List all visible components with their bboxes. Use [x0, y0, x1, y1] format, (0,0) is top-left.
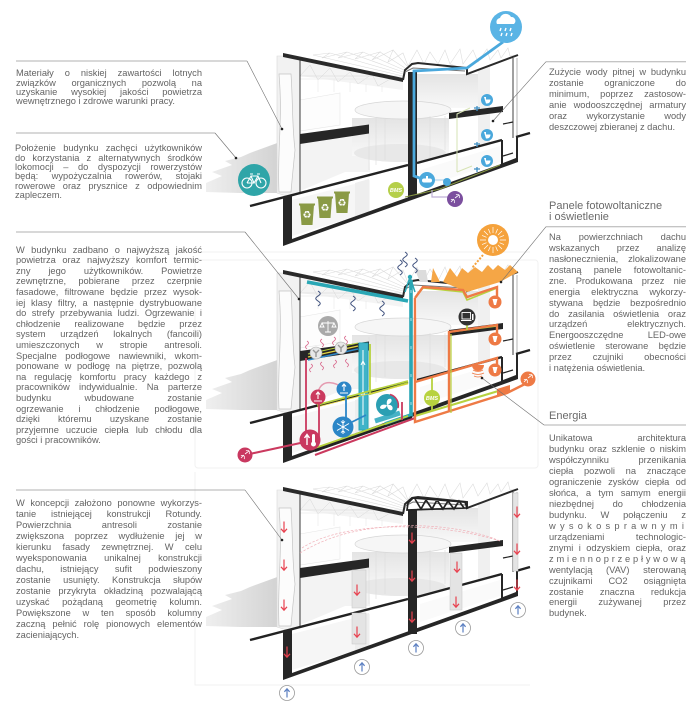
icon: orange link [520, 372, 536, 386]
text: photovoltaics: i natężenia oświetlenia. [549, 363, 645, 373]
leader lines [16, 61, 686, 541]
icon: rain cloud [490, 11, 522, 43]
text: energy: ograniczenie zysków ciepła od [549, 477, 686, 487]
text: photovoltaics: Na powierzchniach dachu [549, 232, 686, 242]
text: construction: zostanie usunięty. Konstrukcja słupów [16, 574, 202, 584]
text: water use: Zużycie wody pitnej w budynku [549, 67, 686, 77]
building section 1: water [206, 11, 530, 246]
text: air quality: gości i pracowników. [16, 435, 101, 445]
dashed arcs [300, 526, 500, 553]
recycling bins: ♻ [321, 203, 330, 214]
photovoltaic roof panels [415, 255, 518, 292]
text: energy: wysokosprawnymi [549, 521, 688, 531]
icon: BMS: BMS [426, 396, 438, 402]
text: location: zapleczem. [15, 190, 62, 200]
icon: BMS [424, 390, 440, 406]
text: photovoltaics: stywana będzie bezpośrednio [549, 298, 686, 308]
pillars [352, 493, 518, 644]
icon: bicycle [238, 164, 270, 196]
text: energy: współczynniku przenikania [549, 455, 686, 465]
text: materials: uzyskanie wysokiej jakości powietrza [16, 87, 202, 97]
icon: water tank [419, 172, 435, 188]
panel: faint frames [195, 252, 538, 685]
text: air quality [16, 245, 202, 445]
text: energy: znymi i odzyskiem ciepła, oraz [549, 543, 686, 553]
text: air quality: dzięki któremu uzyskane zostanie [16, 414, 202, 424]
text: energy: zostanie znaczna redukcja [549, 587, 686, 597]
text: air quality: budynku wbudowane zostanie [16, 393, 202, 403]
heading: energy: Energia [549, 410, 587, 422]
text: energy: zmiennoprzepływową [549, 554, 688, 564]
text: air quality: na regulację komfortu pracy każdego z [16, 372, 202, 382]
text: photovoltaics: oświetlenie sterowane będzie [549, 341, 686, 351]
text: air quality: chłodzenie realizowane będzie przez [16, 319, 202, 329]
text: air quality: Specjalne podłogowe nawiewniki, wkom- [16, 351, 202, 361]
piping [245, 287, 527, 455]
text: photovoltaics: urządzeń elektrycznych. [549, 319, 686, 329]
text: energy: budynek. [549, 608, 587, 618]
text: energy: energii zużywanej przez [549, 597, 686, 607]
text: location: będą: wypożyczalnia rowerów, stojaki [15, 171, 202, 181]
text: photovoltaics: przez czujniki obecności [549, 352, 686, 362]
text: water use: zostanie ograniczone do [549, 78, 686, 88]
icon: heat source [472, 365, 484, 377]
text: energy: Unikatowa architektura [549, 433, 686, 443]
text: water use [549, 67, 686, 132]
air squiggles [306, 252, 417, 372]
text: construction: tanie istniejącej konstrukcji Rotundy. [16, 508, 202, 518]
text: construction: Powiększone w ten sposób kolumny [16, 608, 202, 618]
text: construction: zacieniających. [16, 630, 79, 640]
text: location [15, 143, 202, 200]
text: photovoltaics: zne. Produkowana przez nie [549, 276, 686, 286]
column [408, 72, 417, 198]
heading: photovoltaics: i oświetlenie [549, 211, 609, 223]
arrows: loads [281, 506, 520, 657]
text: air quality: zewnętrzne, pobierane przez czerpnie [16, 276, 202, 286]
text: materials: związków organicznych pozwolą na [16, 78, 202, 88]
text: photovoltaics: do zasilania oświetlenia oraz [549, 309, 686, 319]
text: construction: Powierzchnia antresoli zostanie [16, 520, 202, 530]
text: photovoltaics: energia elektryczna wykorzy- [549, 287, 686, 297]
icon: sun [477, 224, 509, 256]
text: energy: budynku oraz szklenie o niskim [549, 444, 686, 454]
text: construction [16, 498, 202, 640]
text: air quality: system urządzeń lokalnych (fancoili) [16, 329, 202, 339]
icon: light bulbs [488, 296, 502, 376]
text: location: do korzystania z alternatywnych środków [15, 153, 202, 163]
text: air quality: W budynku zadbano o najwyższą jakość [16, 245, 202, 255]
text: construction: zostanie przykryta okładziną pozwalającą [16, 586, 202, 596]
text: construction: uzyskać pożądaną geometrię kolumn. [16, 596, 202, 606]
text: water use: anie wodooszczędnej armatury [549, 100, 686, 110]
icon: snowflake [332, 416, 354, 438]
column and truss [407, 498, 467, 634]
text: energy: ciepła pozwoli na znaczące [549, 466, 686, 476]
text: water use: oraz wykorzystanie wody [549, 111, 686, 121]
icon: BMS [388, 182, 404, 198]
text: energy: wentylacją (VAV) sterowaną [549, 565, 686, 575]
mezzanine ducts [308, 343, 358, 360]
icon: heating up [310, 390, 326, 404]
ventilation duct [307, 277, 415, 430]
text: photovoltaics [549, 232, 686, 373]
text: water use: deszczowej zbieranej z dachu. [549, 122, 675, 132]
text: air quality: zny jego użytkowników. Powietrze [16, 266, 202, 276]
icon: purple link [447, 191, 463, 207]
text: location: rowerowe oraz prysznice z odpowiednim [15, 181, 202, 191]
recycling bins [299, 192, 350, 225]
text: energy: budynku. W połączeniu z [549, 510, 686, 520]
building section 3: construction [206, 482, 530, 700]
text: energy [549, 433, 688, 618]
building section 2: air and energy [206, 224, 536, 463]
text: air quality: ponowane w podłogę na piętrze, pozwolą [16, 361, 202, 371]
text: air quality: iej klasy filtry, a następnie dystrybuowane [16, 298, 202, 308]
text: construction: kierunku fasady zewnętrznej. W celu [16, 542, 202, 552]
icon: fan unit [376, 394, 398, 416]
icon: computer [458, 308, 476, 326]
text: materials [16, 68, 202, 106]
text: air quality: fasadowe, filtrowane będzie przez wysok- [16, 287, 202, 297]
text: air quality: do strefy przebywania ludzi. Ogrzewanie i [16, 308, 202, 318]
icon: thermostat [300, 430, 320, 450]
text: air quality: ogrzewanie i chłodzenie podłogowe, [16, 404, 202, 414]
recycling bins: ♻ [338, 198, 347, 209]
text: photovoltaics: Energooszczędne LED-owe [549, 330, 686, 340]
text: location: lokomocji – do dyspozycji rowerzystów [15, 162, 202, 172]
text: construction: W koncepcji założono ponowne wykorzys- [16, 498, 202, 508]
text: construction: zaczną pełnić rolę pionowych elementów [16, 618, 202, 628]
text: energy: niezbędnej do chłodzenia [549, 499, 686, 509]
text: photovoltaics: zostaną panele fotowoltanic- [549, 265, 686, 275]
text: energy: urządzeniami technologic- [549, 532, 686, 542]
text: energy: słońca, a tym samym energii [549, 488, 686, 498]
heading: photovoltaics: Panele fotowoltaniczne [549, 200, 662, 212]
recycling bins: ♻ [303, 210, 312, 221]
text: materials: Materiały o niskiej zawartości lotnych [16, 68, 202, 78]
text: construction: zwiększona poprzez wydłużenie jej w [16, 530, 202, 540]
text: photovoltaics: nasłonecznienia, zlokalizowane [549, 254, 686, 264]
text: energy: czujnikami CO2 osiągnięta [549, 576, 686, 586]
icon: scale [318, 316, 338, 336]
text: materials: wewnętrznego i zdrowe warunki pracy. [16, 96, 175, 106]
text: air quality: powietrza oraz najwyższy komfort termic- [16, 255, 202, 265]
icon: toilets [474, 94, 493, 172]
text: air quality: pracowników indywidualnie. Na parterze [16, 382, 202, 392]
icon: red link [238, 448, 252, 462]
arrows: foundations [280, 602, 526, 700]
icon: cooling up [336, 382, 352, 396]
text: air quality: przyjemne uczucie ciepła lub chłodu dla [16, 425, 202, 435]
icon: fans [310, 342, 347, 359]
icon: BMS: BMS [390, 188, 402, 194]
heading: photovoltaics [549, 200, 662, 223]
text: air quality: umieszczonych w stropie antresoli. [16, 340, 202, 350]
text: construction: wyeksponowania unikalnej konstrukcji [16, 552, 202, 562]
text: photovoltaics: wskazanych przez analizę [549, 243, 686, 253]
text: construction: dachu, istniejący sufit podwieszony [16, 564, 202, 574]
water pipes [405, 42, 503, 197]
text: water use: minimum, poprzez zastosow- [549, 89, 686, 99]
text: location: Położenie budynku zachęci użytkowników [15, 143, 202, 153]
